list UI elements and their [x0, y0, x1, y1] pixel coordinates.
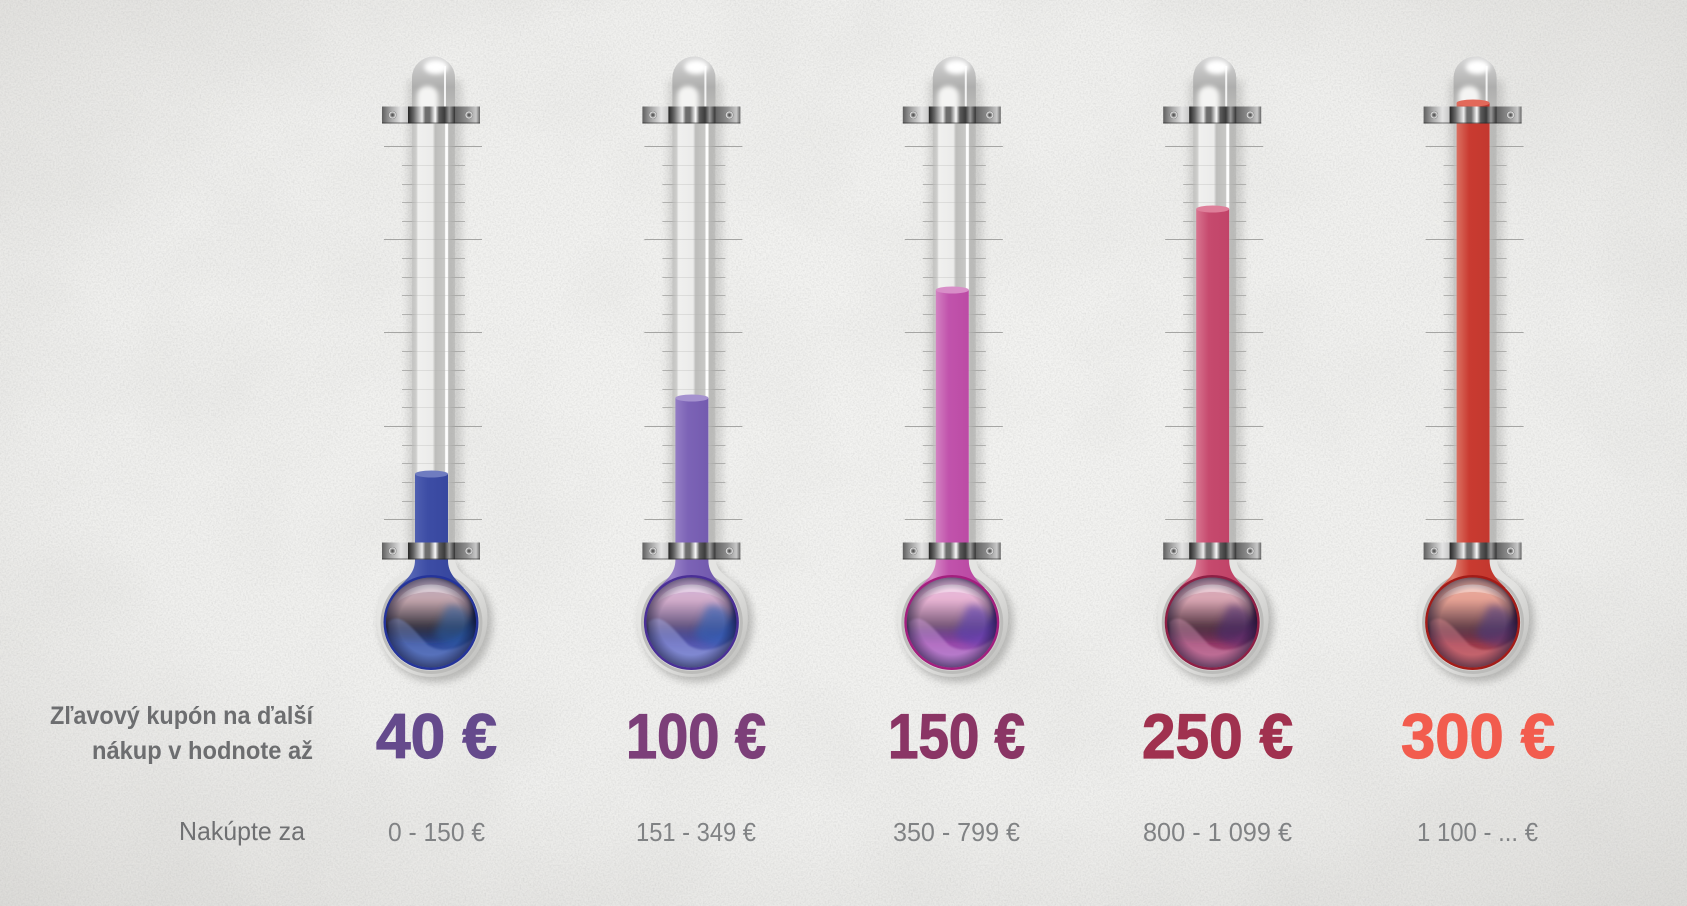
spend ranges: 800 - 1 099 € — [1143, 817, 1293, 847]
coupon values — [376, 702, 1555, 772]
thermometer: 150 euro — [897, 56, 1013, 682]
row label: spend: Nakúpte za — [179, 816, 306, 846]
coupon values: 250 € — [1142, 702, 1293, 772]
bulb — [1418, 575, 1520, 670]
row label: coupon value — [50, 702, 314, 765]
coupon values: 100 € — [626, 702, 766, 772]
bulb — [1157, 575, 1260, 670]
spend ranges: 1 100 - ... € — [1417, 817, 1538, 847]
halo — [377, 556, 493, 682]
bulb — [897, 575, 999, 670]
liquid column — [398, 470, 464, 588]
bulb — [636, 575, 739, 670]
halo — [1158, 556, 1274, 682]
clamps — [382, 106, 480, 560]
thermometer: 250 euro — [1157, 56, 1274, 682]
halo — [1418, 556, 1534, 682]
liquid column — [1440, 100, 1506, 588]
clamps — [1163, 106, 1261, 560]
clamps — [1424, 106, 1522, 560]
liquid column — [658, 394, 724, 588]
clamps — [903, 106, 1001, 560]
liquid column — [919, 286, 985, 588]
coupon values: 150 € — [888, 702, 1025, 772]
coupon values: 40 € — [376, 702, 497, 772]
spend ranges: 0 - 150 € — [388, 817, 485, 847]
liquid column — [1179, 206, 1245, 588]
clamps — [642, 106, 740, 560]
thermometer: 300 euro — [1418, 56, 1534, 682]
thermometer: 40 euro — [376, 56, 493, 682]
coupon values: 300 € — [1401, 702, 1555, 772]
row label: coupon value: Zľavový kupón na ďalší — [50, 702, 314, 730]
spend ranges: 350 - 799 € — [893, 817, 1021, 847]
bulb — [376, 575, 478, 670]
halo — [637, 556, 753, 682]
thermometer: 100 euro — [636, 56, 753, 682]
row label: coupon value: nákup v hodnote až — [92, 737, 313, 765]
spend ranges — [388, 817, 1538, 847]
spend ranges: 151 - 349 € — [636, 817, 756, 847]
halo — [897, 556, 1013, 682]
